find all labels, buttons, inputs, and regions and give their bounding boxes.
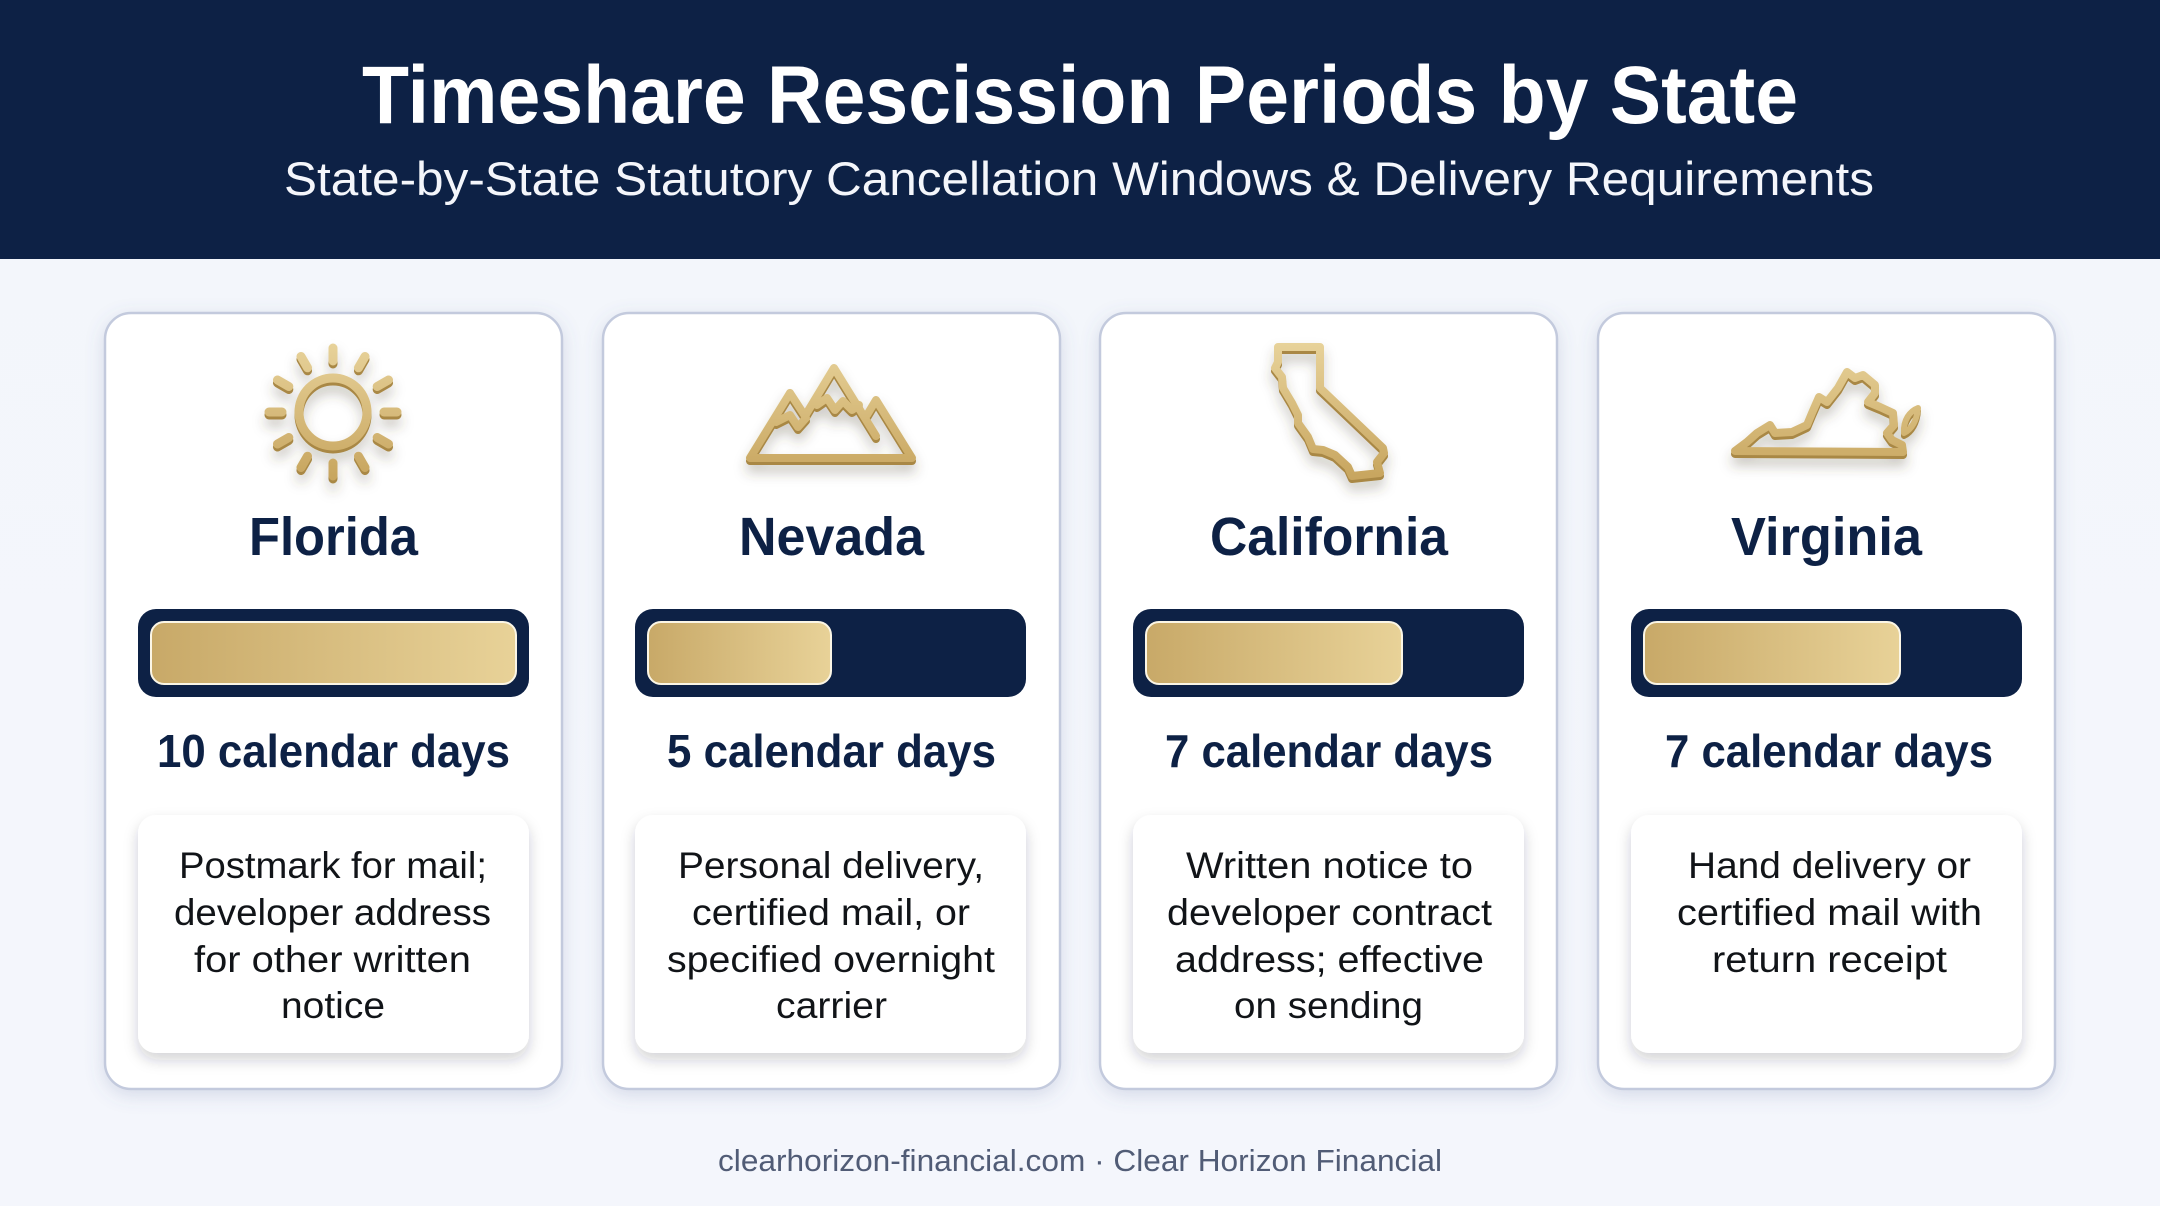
- state name: Virginia: [1731, 507, 1923, 567]
- delivery note: address; effective: [1175, 939, 1484, 980]
- title: Timeshare Rescission Periods by State: [362, 50, 1798, 141]
- duration bar: 5 days: [635, 609, 1026, 697]
- icon: sun: [269, 348, 397, 479]
- delivery note: [138, 815, 529, 1053]
- panel: California: [1100, 313, 1557, 1089]
- state name: California: [1210, 507, 1449, 567]
- duration bar: 7 days: [1631, 609, 2022, 697]
- delivery note: specified overnight: [667, 939, 996, 980]
- delivery note: [1133, 815, 1524, 1053]
- duration bar: 7 days: [1133, 609, 1524, 697]
- delivery note: carrier: [776, 985, 887, 1026]
- delivery note: Written notice to: [1186, 845, 1473, 886]
- state name: Florida: [249, 507, 419, 567]
- delivery note: on sending: [1234, 985, 1423, 1026]
- delivery note: certified mail with: [1677, 892, 1982, 933]
- delivery note: developer address: [174, 892, 491, 933]
- footer source line: clearhorizon-financial.com · Clear Horizon Financial: [718, 1143, 1442, 1178]
- panel: Nevada: [603, 313, 1060, 1089]
- delivery note: [635, 815, 1026, 1053]
- state name: Nevada: [739, 507, 925, 567]
- subtitle: State-by-State Statutory Cancellation Windows & Delivery Requirements: [284, 152, 1874, 205]
- panel: Florida: [105, 313, 562, 1089]
- icon: mountains: [750, 368, 912, 461]
- delivery note: developer contract: [1167, 892, 1493, 933]
- delivery note: certified mail, or: [692, 892, 970, 933]
- delivery note: Postmark for mail;: [179, 845, 487, 886]
- duration label: 7 calendar days: [1665, 725, 1993, 777]
- delivery note: [1631, 815, 2022, 1053]
- panel: Virginia: [1598, 313, 2055, 1089]
- delivery note: for other written: [194, 939, 471, 980]
- duration bar: 10 days: [138, 609, 529, 697]
- icon: Virginia outline: [1735, 372, 1918, 455]
- header banner: [0, 0, 2160, 259]
- delivery note: Personal delivery,: [678, 845, 984, 886]
- delivery note: Hand delivery or: [1688, 845, 1971, 886]
- duration label: 5 calendar days: [667, 725, 996, 777]
- delivery note: notice: [281, 985, 385, 1026]
- delivery note: return receipt: [1712, 939, 1948, 980]
- duration label: 7 calendar days: [1165, 725, 1493, 777]
- duration label: 10 calendar days: [157, 725, 510, 777]
- icon: California outline: [1275, 347, 1384, 479]
